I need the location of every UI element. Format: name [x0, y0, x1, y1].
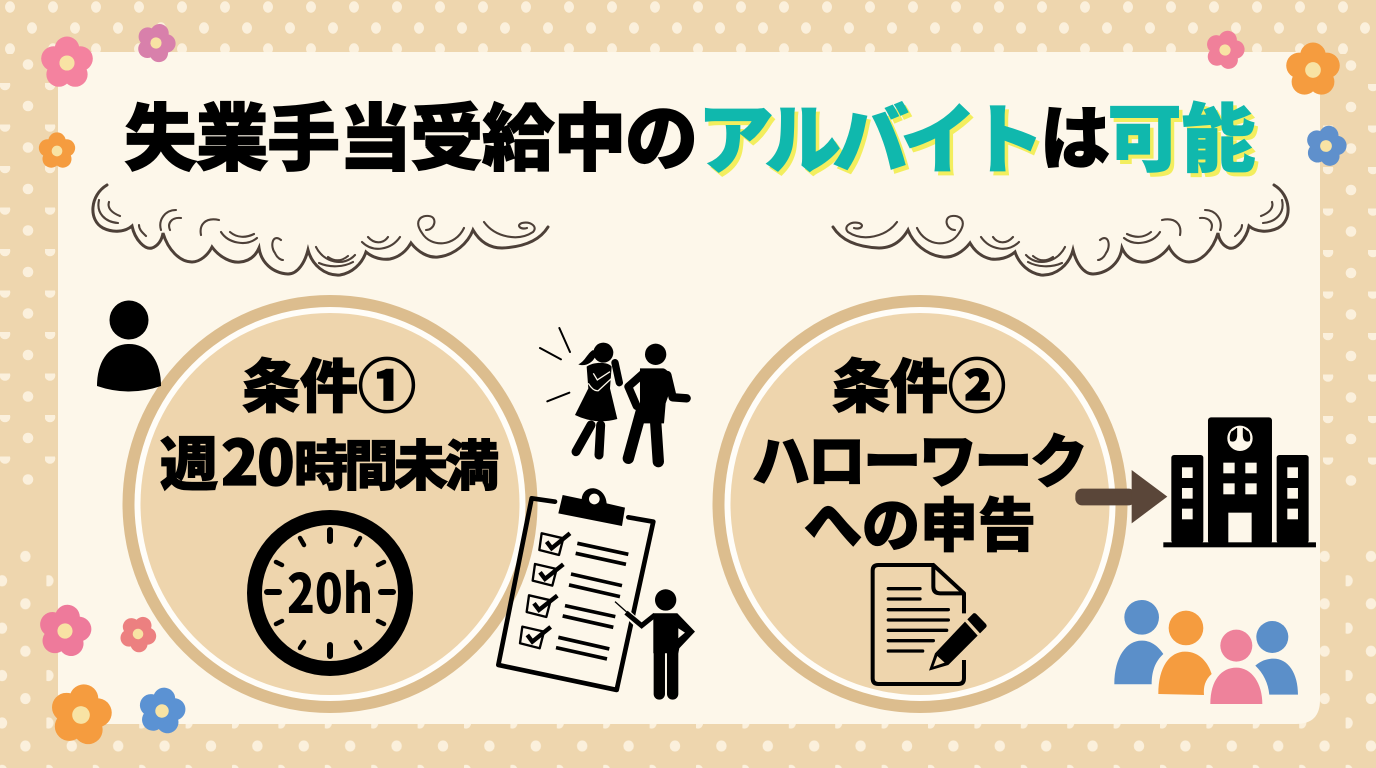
flower: orange left [39, 132, 75, 168]
text: under 20 hours a week: 2 [221, 413, 259, 503]
title: highlighted word アルバイト shadow: アルバイト [701, 103, 1048, 188]
icon: clock 20h: 20h [287, 550, 373, 629]
decorative swirl left [93, 185, 548, 275]
text: under 20 hours a week: 間 [344, 437, 398, 497]
title: black lead text: 失業手当受給中の [124, 99, 698, 180]
text: under 20 hours a week: 0 [257, 413, 295, 503]
decorative swirl right [833, 185, 1288, 275]
icon: single person [97, 300, 161, 392]
icon: couple talking [540, 328, 687, 462]
flower: blue right [1302, 121, 1351, 169]
icon: document and pencil [873, 565, 987, 684]
flower: orange bottom-left [47, 679, 116, 748]
text: under 20 hours a week: 時 [294, 437, 348, 497]
flower: pink top-right [1202, 26, 1249, 72]
text: under 20 hours a week: 満 [445, 437, 499, 497]
title: highlighted word 可能 shadow: 可能 [1111, 102, 1259, 185]
text: under 20 hours a week: 未 [394, 437, 448, 497]
icon: group of people [1114, 600, 1298, 704]
title: highlighted word アルバイト: アルバイト [698, 99, 1044, 184]
icon: clock 20h [254, 518, 406, 668]
flower: pink bottom-left [35, 600, 95, 659]
text: Hello Work: ハローワーク [752, 430, 1088, 495]
flower: salmon bottom-left [114, 609, 163, 657]
flower: blue bottom-left [136, 684, 189, 736]
flower: orange top-right [1286, 43, 1340, 95]
arrow: to Hello Work [1075, 470, 1167, 523]
panel: condition 2 circle [712, 295, 1128, 713]
flower: pink top-left [41, 37, 93, 87]
title: highlighted word 可能: 可能 [1108, 98, 1256, 181]
panel: condition 1 circle [122, 295, 538, 713]
heading: condition 1: 条件① [242, 355, 416, 420]
heading: condition 2: 条件② [832, 355, 1006, 420]
text: under 20 hours a week: 週 [160, 433, 218, 498]
text: declaration: への申告 [804, 494, 1036, 559]
icon: Hello Work building [1163, 417, 1316, 547]
title: particle は: は [1040, 100, 1110, 178]
icon: checklist clipboard with pointing person [498, 488, 695, 694]
flower: magenta top-left [132, 18, 181, 66]
title [124, 98, 1259, 188]
